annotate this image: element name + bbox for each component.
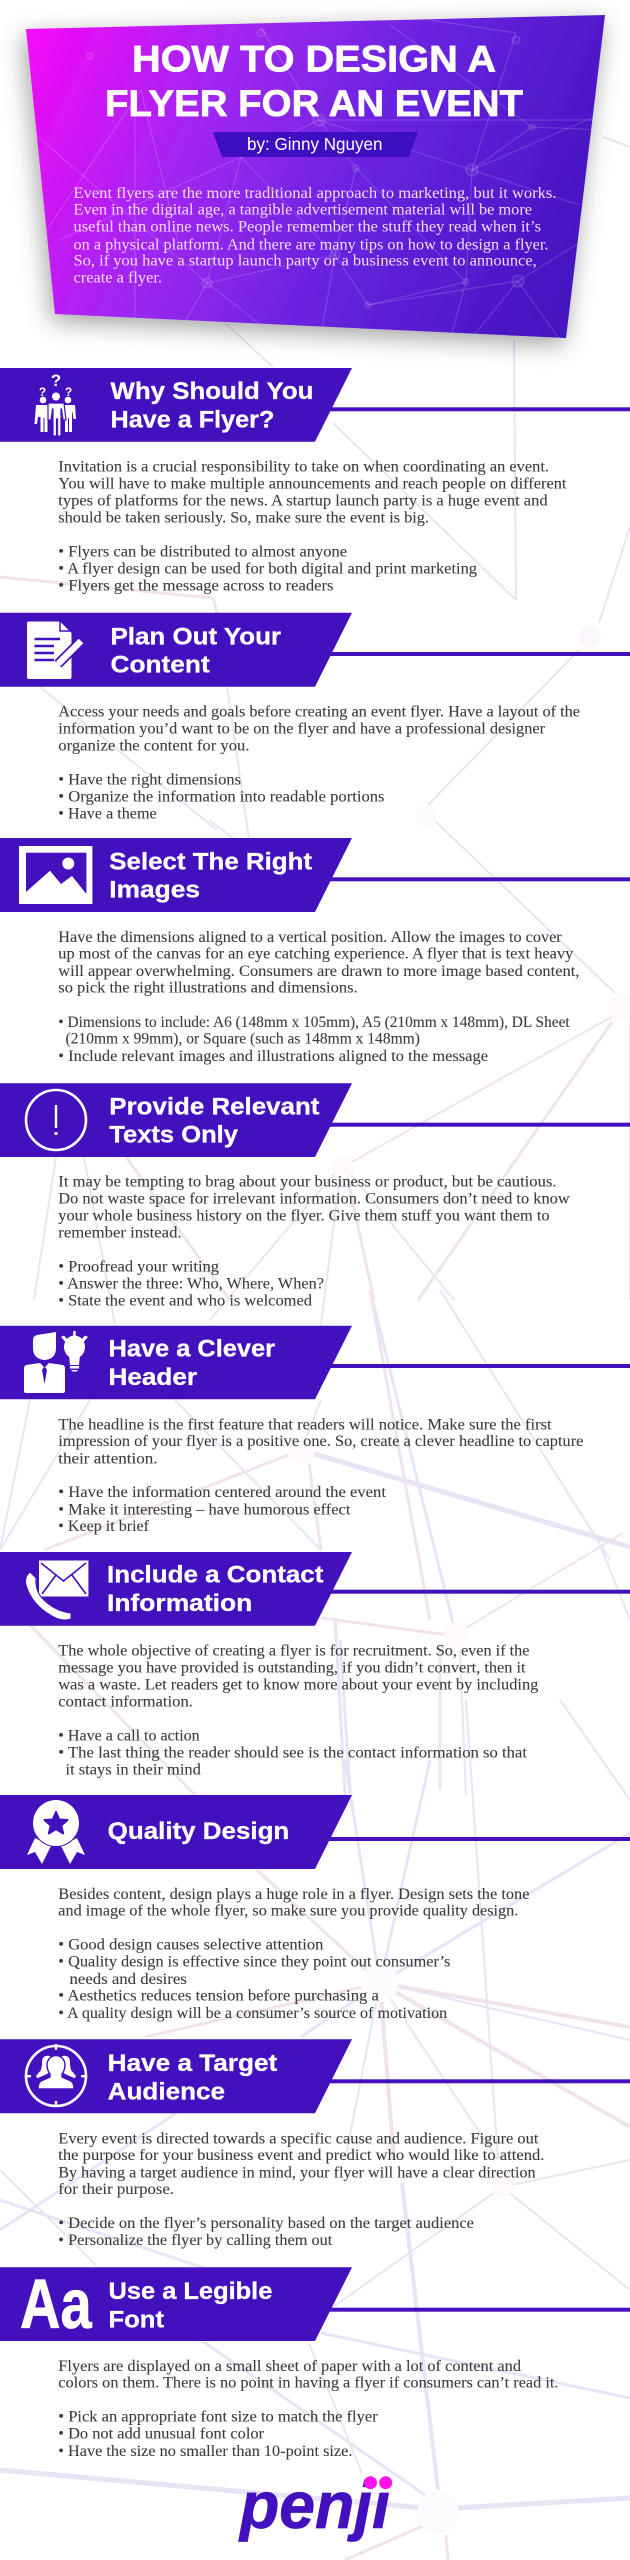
- section 7 text: needs and desires: [70, 1971, 187, 1988]
- section 6: include a contact information: [0, 1552, 630, 1779]
- hero network lines: [30, 20, 610, 340]
- section 1 banner: Have a Flyer?: [110, 406, 274, 433]
- section 8 banner: Have a Target: [108, 2050, 277, 2077]
- section 8 text: By having a target audience in mind, your flyer will have a clear direction: [58, 2164, 536, 2181]
- section 4 banner: Texts Only: [109, 1121, 239, 1148]
- section 8 banner: [0, 2039, 630, 2113]
- icon: people with questions: ?: [51, 371, 61, 390]
- section 1 text: [58, 459, 567, 595]
- section 4 text: Do not waste space for irrelevant information. Consumers don’t need to know: [58, 1190, 570, 1207]
- section 1 text: Invitation is a crucial responsibility to take on when coordinating an event.: [58, 459, 549, 476]
- section 6 text: • Have a call to action: [58, 1728, 200, 1745]
- hero background shape: [26, 15, 605, 338]
- intro paragraph: So, if you have a startup launch party or a business event to announce,: [74, 253, 537, 270]
- section 3 text: (210mm x 99mm), or Square (such as 148mm x 148mm): [66, 1031, 420, 1048]
- section 6 banner: Include a Contact: [107, 1562, 323, 1589]
- section 9 banner: Font: [108, 2307, 164, 2334]
- section 4 text: • Answer the three: Who, Where, When?: [58, 1275, 324, 1292]
- section 9 text: Flyers are displayed on a small sheet of paper with a lot of content and: [58, 2358, 521, 2375]
- section 7 text: • A quality design will be a consumer’s source of motivation: [58, 2005, 447, 2022]
- section 1 text: • Flyers get the message across to readers: [58, 578, 334, 595]
- section 4 text: • Proofread your writing: [58, 1259, 219, 1276]
- icon: people with questions: ?: [65, 385, 72, 399]
- section 4: provide relevant texts only: [0, 1083, 630, 1310]
- section 4 banner: Provide Relevant: [109, 1093, 319, 1120]
- panel: hero intro: [26, 15, 610, 340]
- section 2 text: • Have the right dimensions: [58, 771, 241, 788]
- section 5 text: [58, 1416, 583, 1535]
- section 4 text: It may be tempting to brag about your business or product, but be cautious.: [58, 1174, 557, 1191]
- section 3 text: up most of the canvas for an eye catching experience. A flyer that is text heavy: [58, 946, 573, 963]
- section 1: why should you have a flyer: [0, 368, 630, 595]
- section 2 text: [58, 704, 580, 822]
- section 6 banner: [0, 1552, 630, 1626]
- section 3: select the right images: [0, 838, 630, 1065]
- section 5 banner: Header: [108, 1364, 197, 1391]
- icon: document and pencil: [27, 622, 82, 679]
- section 9 text: colors on them. There is no point in having a flyer if consumers can’t read it.: [58, 2374, 559, 2391]
- section 7 banner: [0, 1795, 630, 1869]
- section 3 text: Have the dimensions aligned to a vertical position. Allow the images to cover: [58, 929, 562, 946]
- section 7 text: and image of the whole flyer, so make sure you provide quality design.: [58, 1903, 518, 1920]
- section 3 text: [58, 929, 579, 1065]
- section 9 text: • Have the size no smaller than 10-point size.: [58, 2443, 352, 2460]
- section 9 banner: [0, 2267, 630, 2341]
- icon: people with questions: ?: [39, 385, 46, 399]
- section 9: use a legible font: [0, 2265, 630, 2460]
- section 8 text: • Personalize the flyer by calling them out: [58, 2232, 333, 2249]
- section 4 text: [58, 1174, 570, 1310]
- section 1 text: should be taken seriously. So, make sure the event is big.: [58, 509, 429, 526]
- logo: penji: penji: [238, 2468, 392, 2542]
- section 7 text: [58, 1886, 530, 2022]
- section 5 text: • Keep it brief: [58, 1518, 150, 1535]
- section 1 text: You will have to make multiple announcements and reach people on different: [58, 475, 567, 492]
- section 5 text: impression of your flyer is a positive one. So, create a clever headline to capture: [58, 1433, 583, 1450]
- section 6 text: contact information.: [58, 1693, 193, 1710]
- section 6 text: • The last thing the reader should see is the contact information so that: [58, 1744, 528, 1761]
- byline ribbon: [213, 132, 418, 157]
- section 5 text: • Have the information centered around the event: [58, 1484, 387, 1501]
- section 2: plan out your content: [0, 613, 630, 822]
- section 7 text: • Quality design is effective since they point out consumer’s: [58, 1954, 450, 1971]
- icon: person with light bulb: [24, 1331, 88, 1393]
- section 3 text: • Include relevant images and illustrations aligned to the message: [58, 1048, 488, 1065]
- intro paragraph: on a physical platform. And there are many tips on how to design a flyer.: [74, 236, 548, 253]
- icon: Aa glyph: Aa: [20, 2265, 92, 2343]
- intro paragraph: Even in the digital age, a tangible advertisement material will be more: [74, 202, 532, 218]
- section 9 text: • Pick an appropriate font size to match the flyer: [58, 2408, 378, 2425]
- section 1 text: • A flyer design can be used for both digital and print marketing: [58, 560, 477, 577]
- intro paragraph: Event flyers are the more traditional approach to marketing, but it works.: [74, 185, 556, 202]
- intro paragraph: create a flyer.: [74, 270, 162, 287]
- section 7 text: Besides content, design plays a huge role in a flyer. Design sets the tone: [58, 1886, 530, 1903]
- icon: exclamation circle: [26, 1090, 86, 1150]
- section 2 banner: Plan Out Your: [110, 623, 281, 650]
- section 5 banner: Have a Clever: [108, 1336, 275, 1363]
- section 2 text: • Organize the information into readable portions: [58, 789, 385, 806]
- icon: envelope and phone: [26, 1560, 88, 1620]
- title: HOW TO DESIGN A: [132, 38, 496, 80]
- section 3 banner: [0, 838, 630, 912]
- section 5 text: • Make it interesting – have humorous effect: [58, 1501, 351, 1518]
- icon: picture frame: [19, 846, 92, 904]
- section 1 banner: Why Should You: [110, 378, 313, 405]
- section 5: have a clever header: [0, 1326, 630, 1535]
- section 2 text: • Have a theme: [58, 805, 157, 822]
- section 6 text: it stays in their mind: [66, 1762, 201, 1779]
- section 3 banner: Select The Right: [109, 848, 312, 875]
- section 4 text: remember instead.: [58, 1224, 182, 1241]
- section 5 text: their attention.: [58, 1450, 157, 1467]
- section 8 text: [58, 2130, 544, 2249]
- section 6 text: [58, 1643, 538, 1779]
- section 4 text: • State the event and who is welcomed: [58, 1293, 312, 1310]
- section 5 text: The headline is the first feature that readers will notice. Make sure the first: [58, 1416, 552, 1433]
- section 2 banner: Content: [110, 651, 210, 678]
- section 4 text: your whole business history on the flyer. Give them stuff you want them to: [58, 1208, 550, 1225]
- section 3 text: will appear overwhelming. Consumers are drawn to more image based content,: [58, 963, 579, 980]
- intro paragraph: [74, 185, 556, 287]
- section 3 text: • Dimensions to include: A6 (148mm x 105mm), A5 (210mm x 148mm), DL Sheet: [58, 1014, 570, 1031]
- icon: award medal: [27, 1799, 85, 1864]
- icon: people with questions: [34, 371, 76, 436]
- icon: target audience: [25, 2044, 87, 2107]
- section 1 text: • Flyers can be distributed to almost anyone: [58, 544, 347, 561]
- section 7 banner: Quality Design: [108, 1818, 289, 1845]
- section 7 text: • Good design causes selective attention: [58, 1936, 323, 1953]
- section 6 banner: Information: [107, 1590, 252, 1617]
- section 2 text: information you’d want to be on the flyer and have a professional designer: [58, 720, 546, 737]
- section 9 text: • Do not add unusual font color: [58, 2426, 265, 2443]
- section 3 banner: Images: [109, 877, 200, 904]
- section 8 text: • Decide on the flyer’s personality based on the target audience: [58, 2215, 474, 2232]
- section 9 banner: Use a Legible: [108, 2278, 272, 2305]
- section 8 text: Every event is directed towards a specific cause and audience. Figure out: [58, 2130, 539, 2147]
- section 8 text: the purpose for your business event and predict who would like to attend.: [58, 2147, 544, 2164]
- section 7: quality design: [0, 1795, 630, 2022]
- section 2 banner: [0, 613, 630, 687]
- intro paragraph: useful than online news. People remember the stuff they read when it’s: [74, 219, 541, 236]
- section 8 text: for their purpose.: [58, 2181, 174, 2198]
- section 4 banner: [0, 1083, 630, 1157]
- title: [105, 38, 523, 124]
- section 1 text: types of platforms for the news. A startup launch party is a huge event and: [58, 493, 548, 510]
- section 6 text: message you have provided is outstanding, if you didn’t convert, then it: [58, 1659, 526, 1676]
- section 8 banner: Audience: [108, 2078, 225, 2105]
- title: FLYER FOR AN EVENT: [105, 83, 523, 124]
- section 3 text: so pick the right illustrations and dimensions.: [58, 980, 358, 997]
- section 5 banner: [0, 1326, 630, 1399]
- section 6 text: was a waste. Let readers get to know more about your event by including: [58, 1677, 538, 1694]
- section 7 text: • Aesthetics reduces tension before purchasing a: [58, 1988, 379, 2005]
- byline ribbon: by: Ginny Nguyen: [247, 134, 382, 154]
- section 2 text: organize the content for you.: [58, 738, 249, 755]
- section 6 text: The whole objective of creating a flyer is for recruitment. So, even if the: [58, 1643, 530, 1660]
- section 8: have a target audience: [0, 2039, 630, 2249]
- section 1 banner: [0, 368, 630, 442]
- section 9 text: [58, 2358, 559, 2460]
- section 2 text: Access your needs and goals before creating an event flyer. Have a layout of the: [58, 704, 580, 721]
